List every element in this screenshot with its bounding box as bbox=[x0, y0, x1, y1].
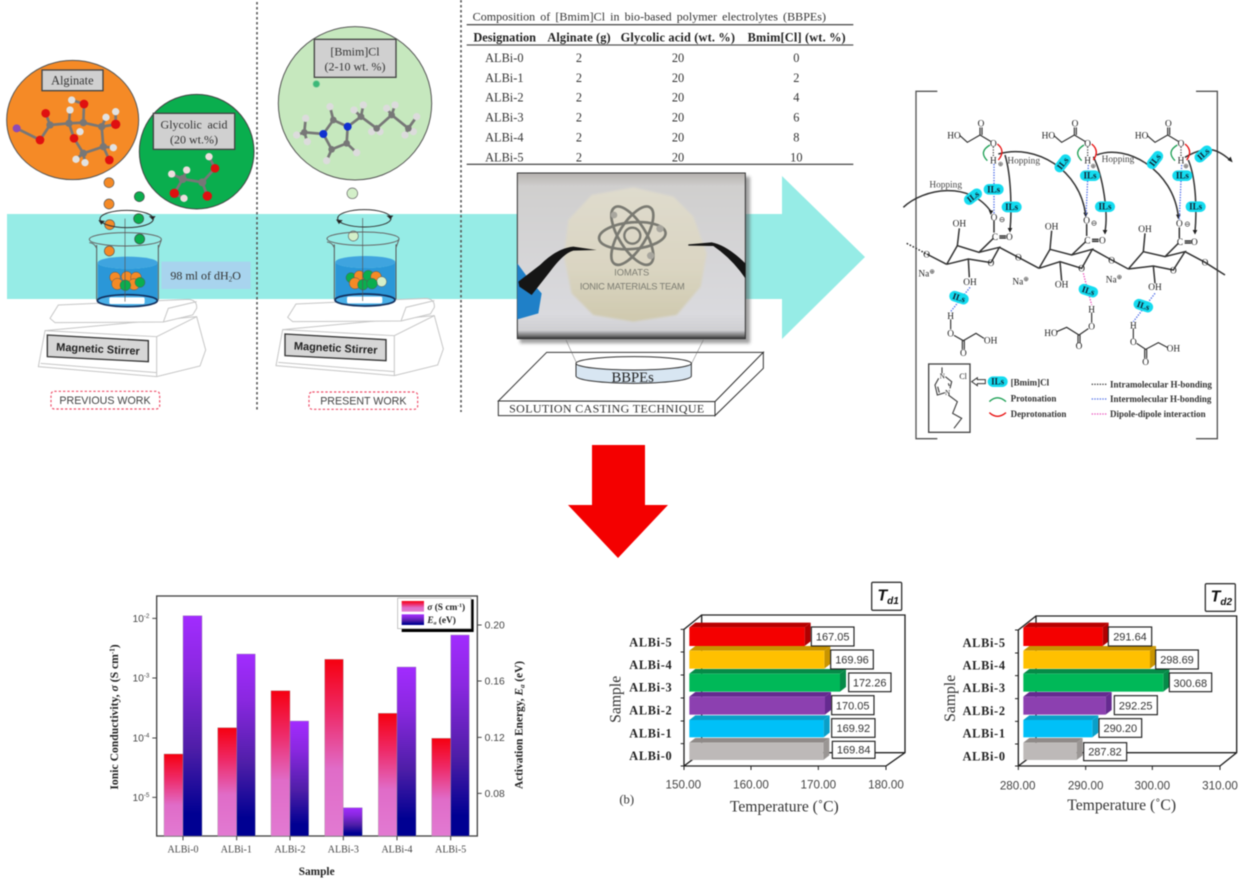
ionic liquid markers: ILs bbox=[1147, 151, 1163, 168]
table header: Glycolic acid (wt. %) bbox=[621, 30, 735, 44]
Td2 tag: d2 bbox=[1220, 597, 1233, 608]
right axis values: 0.16 bbox=[485, 677, 505, 688]
legend: interaction keys: Protonation bbox=[1011, 393, 1056, 403]
top glycolic atom labels bbox=[947, 120, 1189, 170]
bottom glycolic atom labels: H bbox=[1130, 321, 1137, 331]
brackets bbox=[916, 91, 1217, 439]
backbone atom labels: O bbox=[991, 214, 998, 224]
ionic liquid markers: ILs bbox=[1189, 202, 1203, 212]
top glycolic atom labels: H bbox=[990, 156, 997, 166]
x axis values: 170.00 bbox=[801, 779, 837, 792]
axis ticks bbox=[152, 618, 482, 840]
backbone atom labels bbox=[918, 214, 1209, 293]
x axis values: 290.00 bbox=[1068, 779, 1104, 792]
alginate backbone bbox=[907, 221, 1225, 283]
table rows: 2 bbox=[576, 150, 582, 164]
sample labels bbox=[963, 636, 1006, 763]
top glycolic atom labels: H bbox=[1084, 156, 1091, 166]
ionic liquid markers: ILs bbox=[1176, 171, 1189, 181]
Td1 tag bbox=[872, 582, 902, 610]
right axis title: Activation Energy, E bbox=[513, 688, 525, 789]
table rows: ALBi-1 bbox=[485, 71, 524, 85]
falling glycolic acid droplets bbox=[134, 192, 145, 244]
ionic liquid markers: ILs bbox=[1098, 202, 1112, 212]
left axis title: -1 bbox=[108, 648, 116, 654]
Td1 tag: d1 bbox=[887, 596, 899, 607]
casting plate bbox=[498, 340, 763, 416]
panel letter: (b) bbox=[619, 792, 634, 806]
top glycolic atom labels: HO bbox=[947, 132, 961, 142]
table title: Composition of [Bmim]Cl in bio-based polymer electrolytes (BBPEs) bbox=[473, 10, 826, 24]
right axis values: 0.12 bbox=[485, 733, 505, 744]
right tweezers bbox=[688, 242, 745, 278]
backbone atom labels: O bbox=[1099, 236, 1106, 246]
panel: composition table bbox=[467, 10, 853, 164]
backbone atom labels: O bbox=[1170, 266, 1177, 276]
table rows: 10 bbox=[790, 150, 802, 164]
backbone atom labels: ⊖ bbox=[1091, 218, 1097, 227]
bottom glycolic atom labels: O bbox=[1130, 338, 1137, 348]
3D plot frame bbox=[684, 615, 905, 766]
big red arrow bbox=[568, 445, 668, 558]
table rows: 2 bbox=[793, 71, 799, 85]
bar: ALBi-5 bbox=[1023, 623, 1109, 646]
table rows: 2 bbox=[576, 51, 582, 65]
backbone atom labels: O bbox=[1176, 220, 1183, 230]
right axis values: 0.08 bbox=[485, 789, 505, 800]
table rows: 8 bbox=[793, 130, 799, 144]
chart legend: E bbox=[426, 616, 434, 626]
ionic liquid markers: ILs bbox=[1136, 299, 1152, 313]
hopping labels: Hopping bbox=[929, 180, 962, 190]
top glycolic atom labels: HO bbox=[1042, 132, 1055, 142]
table rows: 20 bbox=[672, 130, 684, 144]
value labels: 290.20 bbox=[1104, 723, 1137, 735]
bottom glycolic atom labels: OH bbox=[1167, 345, 1180, 355]
chart: ionic conductivity and activation energy bbox=[108, 596, 526, 878]
x axis title: Temperature (˚C) bbox=[1067, 797, 1176, 814]
legend: interaction keys: [Bmim]Cl bbox=[1011, 377, 1050, 387]
magnetic stirrer bbox=[276, 298, 443, 376]
panel: film photograph bbox=[498, 173, 763, 416]
table rows: 20 bbox=[672, 51, 684, 65]
left axis values: -5 bbox=[144, 792, 150, 799]
sample labels: ALBi-2 bbox=[629, 704, 672, 718]
plot frame bbox=[157, 596, 477, 836]
y axis title: Sample bbox=[608, 676, 625, 723]
divider: present work vs casting bbox=[460, 0, 462, 412]
water volume label: O bbox=[232, 268, 241, 282]
backbone atom labels: C bbox=[1177, 238, 1183, 248]
value labels: 292.25 bbox=[1119, 700, 1152, 712]
legend: hollow arrow bbox=[972, 378, 985, 386]
3D plot frame bbox=[1018, 616, 1237, 766]
bar: ALBi-0 bbox=[1023, 738, 1083, 760]
table rows: 6 bbox=[793, 110, 799, 124]
backbone atom labels: Na bbox=[918, 270, 929, 280]
magnetic stirrer: Magnetic Stirrer bbox=[56, 341, 141, 358]
table rows: 20 bbox=[672, 91, 684, 105]
backbone atom labels: O bbox=[1202, 259, 1209, 269]
backbone atom labels: OH bbox=[1055, 280, 1069, 290]
casting plate: BBPEs bbox=[611, 370, 654, 386]
protonation arcs bbox=[983, 144, 1190, 161]
value labels: 169.84 bbox=[837, 745, 870, 757]
magnetic stirrer: Magnetic Stirrer bbox=[294, 340, 378, 357]
value labels: 172.26 bbox=[853, 677, 886, 689]
bar: ALBi-3 bbox=[1023, 669, 1169, 692]
ionic liquid markers: ILs bbox=[951, 291, 967, 305]
gloved hand with tweezers bbox=[517, 247, 597, 319]
top glycolic atom labels: O bbox=[1072, 120, 1079, 130]
table rows: 20 bbox=[672, 110, 684, 124]
conductivity bars bbox=[164, 659, 451, 836]
backbone atom labels: ⊕ bbox=[929, 268, 935, 275]
y axis title: Sample bbox=[942, 675, 959, 722]
sample labels: ALBi-5 bbox=[963, 636, 1006, 650]
bar: ALBi-1 bbox=[1023, 715, 1098, 737]
x axis values: 280.00 bbox=[1000, 779, 1036, 792]
[Bmim]Cl molecule bubble: [Bmim]Cl bbox=[330, 45, 380, 59]
backbone atom labels: OH bbox=[1148, 283, 1162, 293]
backbone atom labels: C bbox=[1084, 236, 1090, 246]
legend: bmim structure: N bbox=[940, 372, 946, 381]
bar: ALBi-0 bbox=[689, 738, 829, 760]
axis ticks bbox=[681, 629, 886, 770]
ionic liquid markers: ILs bbox=[991, 377, 1005, 387]
panel: present work bbox=[276, 27, 443, 409]
table rows: ALBi-5 bbox=[485, 150, 524, 164]
hopping arrows bbox=[903, 150, 1230, 232]
right axis title: (eV) bbox=[513, 661, 525, 685]
table rows: ALBi-0 bbox=[485, 51, 524, 65]
[Bmim]Cl molecule bubble bbox=[278, 27, 432, 180]
legend: interaction keys: Intramolecular H-bonding bbox=[1110, 379, 1212, 389]
top glycolic atom labels: H bbox=[1178, 156, 1185, 166]
glycolic acid units, bottom bbox=[951, 313, 1167, 358]
sample labels: ALBi-4 bbox=[963, 658, 1006, 672]
sample labels: ALBi-0 bbox=[963, 749, 1006, 763]
atom logo bbox=[598, 200, 667, 271]
panel: chemical interaction scheme bbox=[903, 91, 1233, 439]
water volume label bbox=[161, 262, 251, 289]
legend: bmim structure: N bbox=[945, 388, 951, 397]
ionic liquid markers bbox=[948, 143, 1214, 387]
glycolic acid molecule bubble bbox=[139, 94, 254, 209]
right axis values: 0.20 bbox=[485, 621, 505, 632]
alginate molecule bubble: Alginate bbox=[51, 74, 94, 88]
present work label: PRESENT WORK bbox=[320, 396, 406, 408]
backbone atom labels: O bbox=[1108, 256, 1115, 266]
table header: Alginate (g) bbox=[547, 30, 611, 44]
sample labels bbox=[629, 635, 672, 763]
backbone atom labels: C bbox=[992, 233, 998, 243]
sample labels bbox=[167, 845, 466, 856]
chart: Td1 decomposition temperature bbox=[608, 582, 905, 815]
backbone atom labels: ⊕ bbox=[1023, 276, 1029, 283]
sample labels: ALBi-1 bbox=[221, 845, 252, 856]
top glycolic atom labels: O bbox=[978, 120, 985, 130]
right axis title: a bbox=[518, 684, 526, 688]
chart legend: a bbox=[434, 621, 437, 627]
top glycolic atom labels: O bbox=[990, 139, 997, 149]
legend: interaction keys bbox=[989, 377, 1212, 419]
x axis values: 180.00 bbox=[868, 779, 904, 792]
ionic liquid markers: ILs bbox=[1081, 284, 1097, 298]
film logo text: IOMATS bbox=[614, 267, 649, 277]
stirring rotation arrows bbox=[337, 210, 392, 227]
bottom glycolic atom labels: O bbox=[947, 330, 954, 340]
backbone atom labels: ⊖ bbox=[1184, 220, 1190, 229]
backbone atom labels: OH bbox=[963, 278, 977, 288]
glycolic acid molecule bubble: Glycolic acid bbox=[161, 117, 227, 131]
film logo text bbox=[580, 267, 685, 291]
ionic liquid markers: ILs bbox=[1083, 171, 1097, 181]
table rules bbox=[467, 25, 853, 164]
chart legend: -1 bbox=[457, 603, 462, 609]
legend: interaction keys: Dipole-dipole interaction bbox=[1110, 409, 1206, 419]
sample labels: ALBi-3 bbox=[629, 681, 672, 695]
legend: interaction keys: Intermolecular H-bonding bbox=[1110, 394, 1212, 404]
bottom glycolic atom labels: O bbox=[1142, 358, 1149, 368]
stirring rotation arrows bbox=[99, 210, 155, 228]
divider: previous vs present work bbox=[256, 2, 258, 411]
x axis values bbox=[1000, 779, 1238, 792]
backbone atom labels: Na bbox=[1012, 277, 1023, 287]
sample labels: ALBi-5 bbox=[629, 635, 672, 649]
ionic liquid markers: ILs bbox=[1195, 146, 1212, 162]
ionic liquid markers: ILs bbox=[1005, 202, 1019, 212]
x axis values bbox=[666, 779, 904, 792]
x axis values: 300.00 bbox=[1135, 779, 1171, 792]
value labels: 298.69 bbox=[1160, 655, 1194, 667]
present work label bbox=[309, 392, 418, 409]
bottom glycolic atom labels: OH bbox=[984, 336, 998, 346]
x axis values: 310.00 bbox=[1202, 779, 1238, 792]
bottom glycolic atom labels: H bbox=[1088, 305, 1095, 315]
table rows bbox=[485, 51, 802, 164]
sample labels: ALBi-0 bbox=[629, 749, 672, 763]
x axis title: Temperature (˚C) bbox=[730, 798, 839, 815]
bottom glycolic atom labels: HO bbox=[1044, 329, 1058, 339]
top glycolic atom labels: ⊕ bbox=[1183, 163, 1189, 170]
beaker with solution bbox=[327, 218, 399, 306]
x axis values: 160.00 bbox=[733, 779, 769, 792]
bottom glycolic atom labels: O bbox=[1076, 342, 1083, 352]
bar: ALBi-1 bbox=[689, 715, 830, 737]
hopping labels: Hopping bbox=[1102, 155, 1135, 165]
film logo text: IONIC MATERIALS TEAM bbox=[580, 281, 685, 291]
table rows: 20 bbox=[672, 150, 684, 164]
top glycolic atom labels: ⊕ bbox=[1091, 163, 1097, 170]
backbone atom labels: O bbox=[1191, 238, 1198, 248]
value labels: 170.05 bbox=[836, 700, 869, 712]
chart legend bbox=[398, 598, 474, 632]
backbone atom labels: O bbox=[1015, 254, 1022, 264]
left axis title: Ionic Conductivity, σ (S cm bbox=[108, 654, 121, 790]
ionic liquid markers: ILs bbox=[1055, 155, 1071, 172]
backbone atom labels: Na bbox=[1106, 275, 1117, 285]
backbone atom labels: O bbox=[1006, 233, 1013, 243]
value labels: 300.68 bbox=[1174, 678, 1207, 690]
hopping labels bbox=[929, 155, 1135, 190]
water volume label: 2 bbox=[229, 275, 233, 284]
table rows: 2 bbox=[576, 91, 582, 105]
backbone atom labels: O bbox=[1083, 216, 1090, 226]
left axis values: -4 bbox=[144, 733, 150, 740]
value labels: 169.96 bbox=[835, 655, 869, 667]
value labels: 291.64 bbox=[1113, 632, 1147, 644]
process band arrow bbox=[7, 176, 865, 339]
panel: previous work bbox=[7, 60, 254, 409]
sample labels: ALBi-2 bbox=[274, 845, 306, 856]
previous work label bbox=[51, 391, 160, 409]
table rows: 4 bbox=[793, 91, 799, 105]
falling [Bmim]Cl droplets bbox=[347, 188, 358, 241]
bar: ALBi-4 bbox=[1023, 646, 1156, 669]
table header bbox=[473, 30, 846, 44]
value labels: 287.82 bbox=[1088, 746, 1122, 758]
falling alginate droplets bbox=[104, 178, 115, 256]
legend: bmim structure bbox=[929, 364, 970, 432]
sample labels: ALBi-5 bbox=[435, 845, 466, 856]
bottom glycolic atom labels: O bbox=[960, 349, 967, 359]
left axis values: -3 bbox=[144, 673, 150, 680]
beaker with solution bbox=[89, 219, 161, 307]
backbone atom labels: OH bbox=[1138, 225, 1152, 235]
Td2 tag: T bbox=[1211, 589, 1220, 606]
backbone atom labels: OH bbox=[1045, 222, 1059, 232]
electrolyte film bbox=[564, 187, 707, 322]
bottom glycolic atom labels: H bbox=[947, 312, 954, 322]
table rows: 2 bbox=[576, 110, 582, 124]
axis ticks bbox=[1015, 630, 1220, 770]
table rows: 0 bbox=[793, 51, 799, 65]
water volume label: 98 ml of dH bbox=[170, 268, 229, 282]
backbone atom labels: O bbox=[1078, 265, 1085, 275]
previous work label: PREVIOUS WORK bbox=[59, 395, 151, 407]
Td2 tag bbox=[1205, 584, 1235, 611]
backbone atom labels: ⊖ bbox=[999, 215, 1005, 224]
bar: ALBi-5 bbox=[689, 623, 811, 646]
chart: Td2 decomposition temperature bbox=[942, 584, 1238, 814]
table rows: 2 bbox=[576, 130, 582, 144]
table header: Designation bbox=[473, 30, 536, 44]
top glycolic atom labels: O bbox=[1165, 120, 1172, 130]
right axis values bbox=[485, 621, 505, 800]
left axis values: -2 bbox=[144, 613, 150, 620]
left axis values: 10 bbox=[133, 674, 144, 685]
x axis title: Sample bbox=[299, 866, 335, 878]
magnetic stirrer bbox=[38, 299, 206, 377]
sample labels: ALBi-2 bbox=[963, 704, 1006, 718]
bottom glycolic atom labels bbox=[947, 305, 1180, 368]
left axis values: 10 bbox=[133, 734, 144, 745]
alginate molecule bubble bbox=[7, 60, 139, 180]
sample labels: ALBi-4 bbox=[381, 845, 413, 856]
Td1 tag: T bbox=[877, 588, 887, 605]
bottom glycolic atom labels: O bbox=[1088, 322, 1095, 332]
table rows: ALBi-4 bbox=[485, 130, 524, 144]
sample labels: ALBi-1 bbox=[963, 727, 1006, 741]
value labels bbox=[811, 627, 891, 758]
legend: bmim structure: Cl bbox=[959, 372, 968, 381]
top glycolic atom labels: ⊕ bbox=[998, 161, 1004, 168]
chart legend: σ (S cm bbox=[427, 603, 457, 613]
sample labels: ALBi-4 bbox=[629, 658, 672, 672]
chart legend: ) bbox=[462, 602, 465, 613]
bar: ALBi-2 bbox=[689, 692, 831, 715]
table header: Bmim[Cl] (wt. %) bbox=[748, 30, 846, 44]
table rows: 2 bbox=[576, 71, 582, 85]
left axis values: 10 bbox=[133, 793, 144, 804]
left axis title: ) bbox=[108, 644, 121, 648]
ionic liquid markers: ILs bbox=[987, 184, 1001, 194]
table rows: ALBi-2 bbox=[485, 91, 524, 105]
glycolic acid molecule bubble: (20 wt.%) bbox=[170, 132, 218, 146]
[Bmim]Cl molecule bubble: (2-10 wt. %) bbox=[325, 60, 385, 74]
bar: ALBi-2 bbox=[1023, 692, 1112, 715]
hydrogen bond dotted lines bbox=[951, 147, 1182, 322]
sample labels: ALBi-3 bbox=[963, 681, 1006, 695]
bar: ALBi-3 bbox=[689, 669, 846, 692]
backbone atom labels: O bbox=[923, 250, 930, 260]
table rows: ALBi-3 bbox=[485, 110, 524, 124]
sample labels: ALBi-1 bbox=[629, 726, 672, 740]
activation energy bars bbox=[183, 616, 469, 836]
value labels bbox=[1084, 627, 1212, 761]
hopping labels: Hopping bbox=[1007, 156, 1040, 166]
top glycolic atom labels: HO bbox=[1135, 132, 1149, 142]
backbone atom labels: O bbox=[988, 259, 995, 269]
bar: ALBi-4 bbox=[689, 646, 830, 669]
glycolic acid units, top bbox=[960, 127, 1178, 142]
casting plate: SOLUTION CASTING TECHNIQUE bbox=[509, 402, 704, 416]
top glycolic atom labels: O bbox=[1178, 139, 1185, 149]
backbone atom labels: OH bbox=[953, 220, 966, 230]
x axis values: 150.00 bbox=[666, 779, 702, 792]
left axis values: 10 bbox=[133, 614, 144, 625]
ionic liquid markers: ILs bbox=[965, 188, 982, 205]
legend: interaction keys: Deprotonation bbox=[1011, 409, 1066, 419]
chart legend: (eV) bbox=[436, 615, 456, 626]
value labels: 167.05 bbox=[816, 632, 849, 644]
table rows: 20 bbox=[672, 71, 684, 85]
top glycolic atom labels: O bbox=[1084, 139, 1091, 149]
arrow heads bbox=[989, 157, 1233, 235]
value labels: 169.92 bbox=[837, 723, 870, 735]
sample labels: ALBi-3 bbox=[328, 845, 359, 856]
backbone atom labels: ⊕ bbox=[1117, 274, 1123, 281]
left axis values bbox=[133, 613, 150, 804]
sample labels: ALBi-0 bbox=[167, 845, 199, 856]
